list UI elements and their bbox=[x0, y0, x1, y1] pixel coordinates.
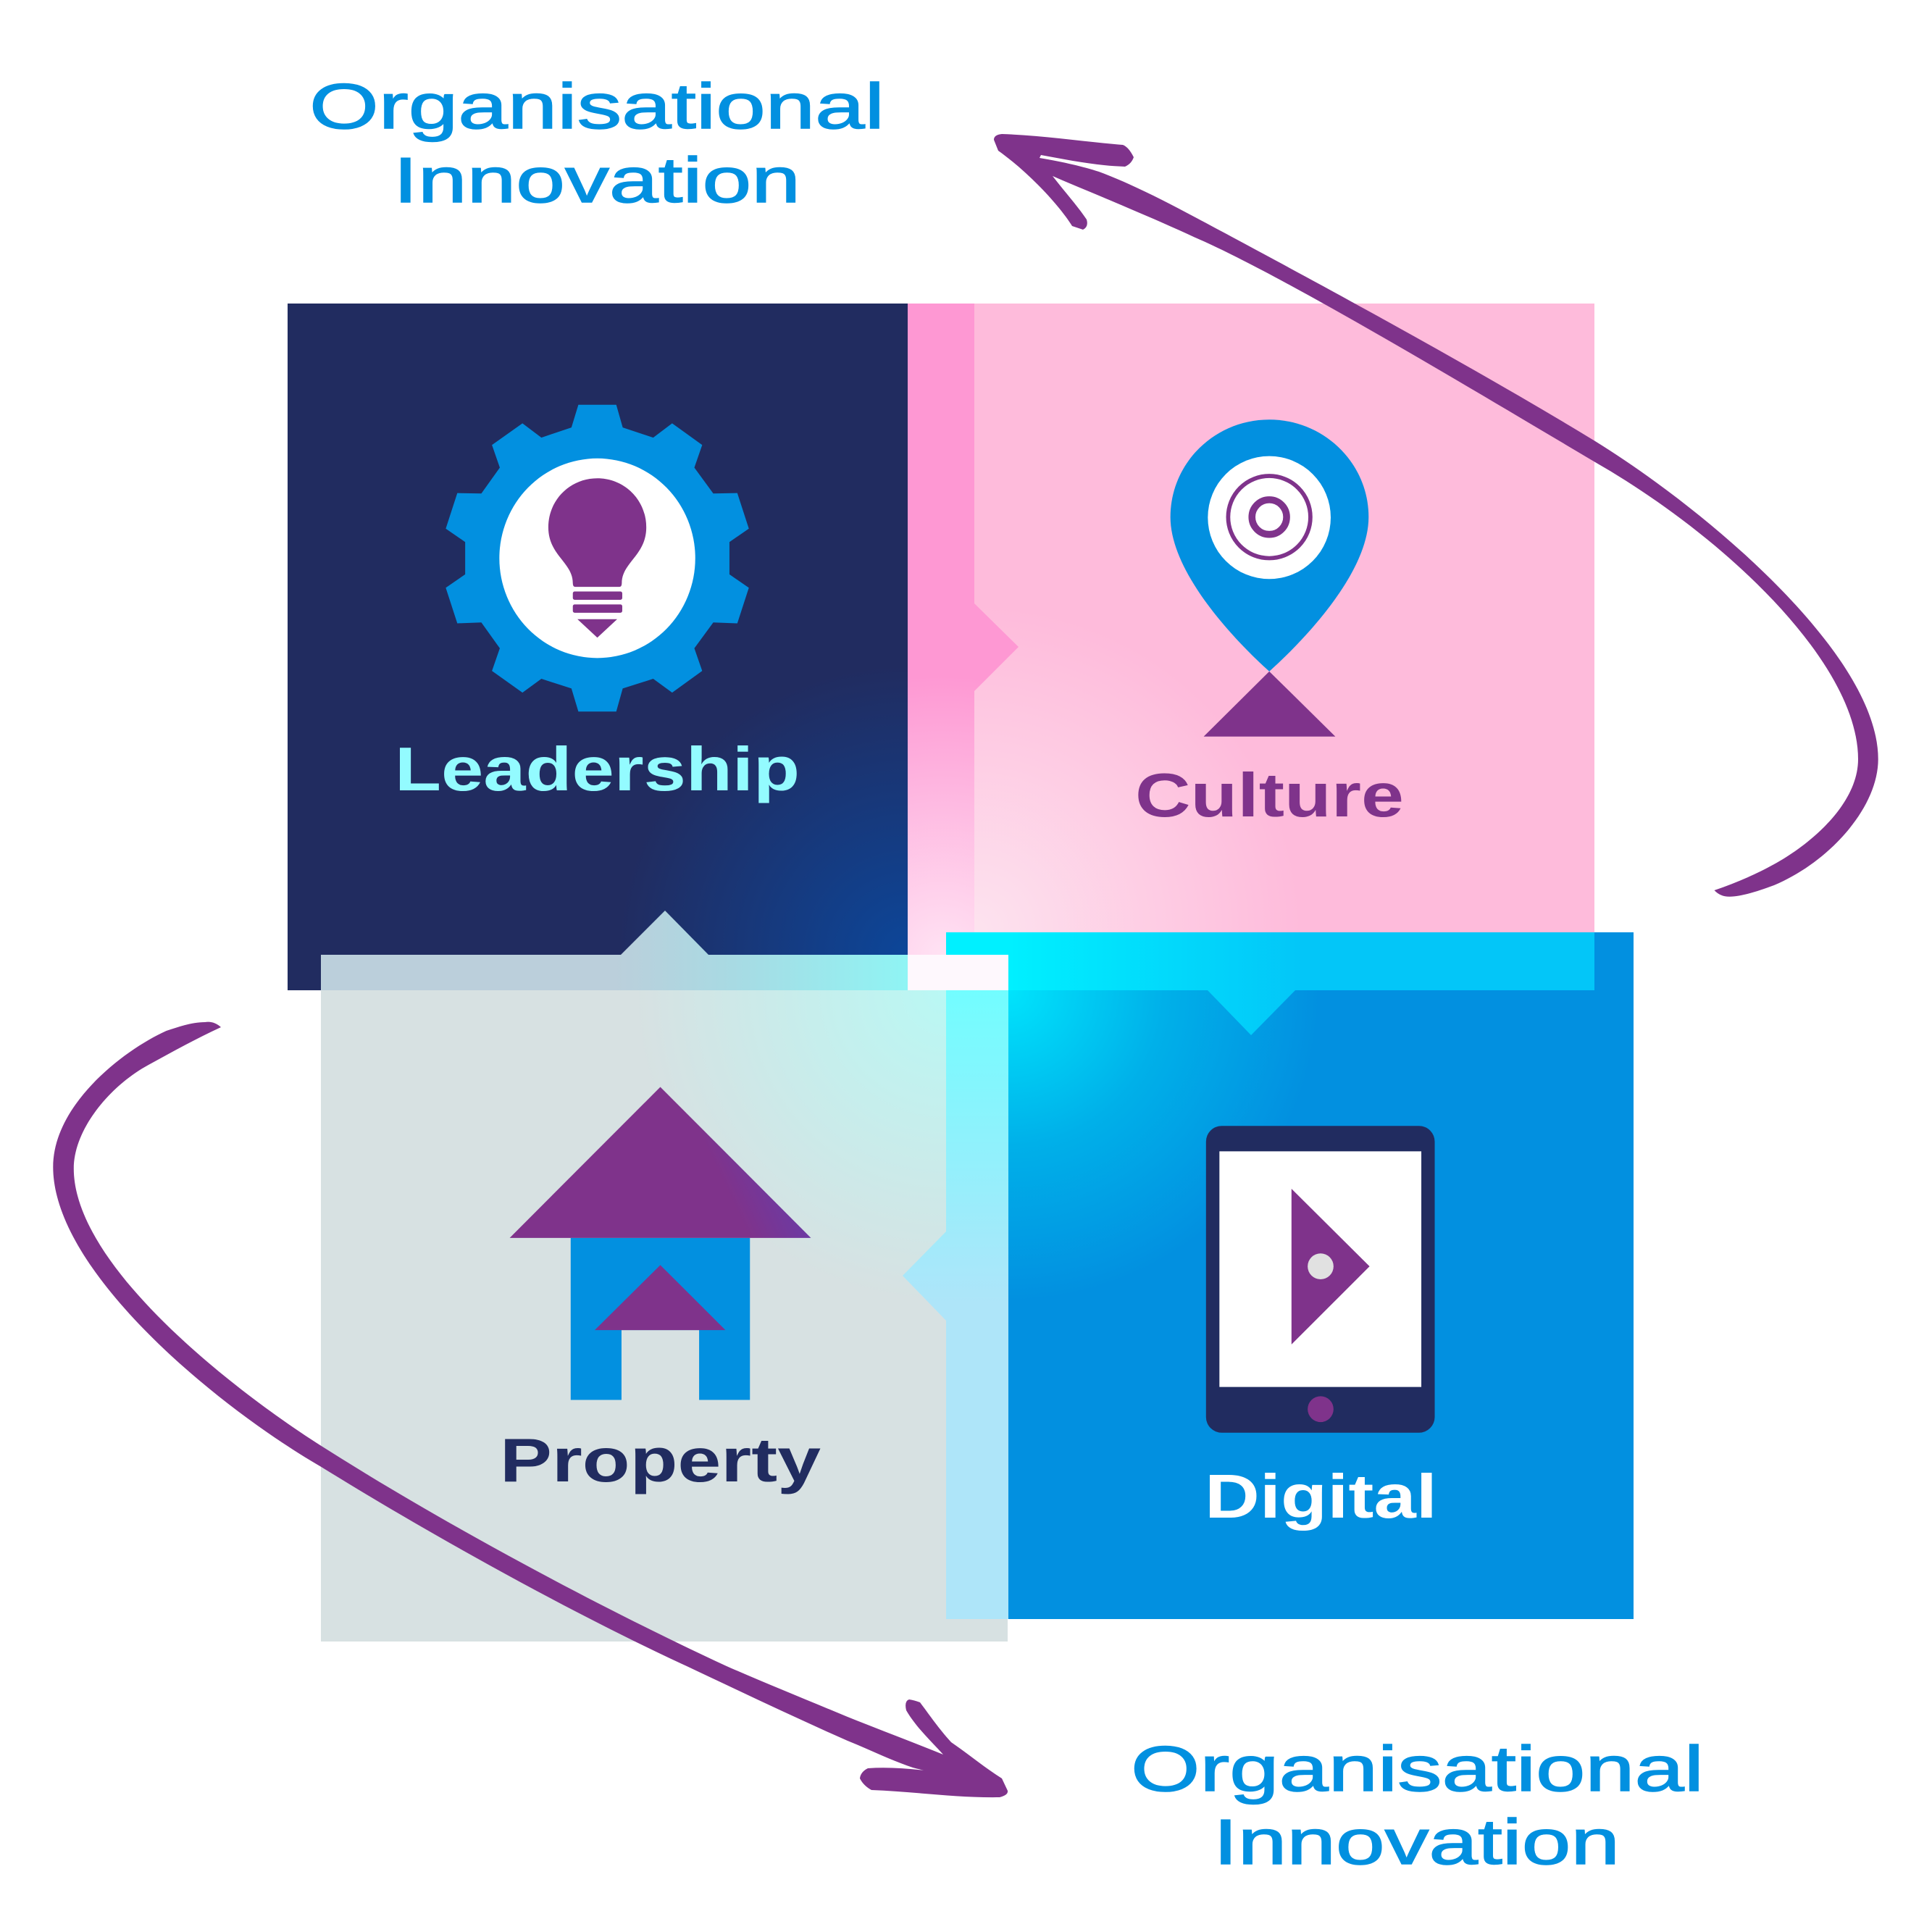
panel: leadership background bbox=[288, 304, 974, 990]
label: culture: Culture bbox=[1135, 761, 1404, 830]
overlap: property arrow tab over leadership bbox=[321, 911, 908, 990]
heading: organisational innovation top: Organisational bbox=[309, 70, 885, 142]
heading: organisational innovation bottom: Innovation bbox=[1213, 1806, 1620, 1878]
heading: organisational innovation top: Innovation bbox=[393, 144, 800, 216]
heading: organisational innovation bottom: Organisational bbox=[1131, 1733, 1704, 1805]
heading: organisational innovation top bbox=[309, 70, 885, 216]
arrow: top right curved arrow bbox=[994, 134, 1878, 897]
heading: organisational innovation bottom bbox=[1131, 1733, 1704, 1878]
icon: house bbox=[510, 1087, 811, 1400]
overlap: centre highlight bbox=[908, 955, 1008, 990]
overlap: culture arrow tab over digital bbox=[946, 932, 1594, 1035]
overlap: digital arrow tab over property bbox=[903, 990, 1008, 1619]
arrow: bottom left curved arrow bbox=[53, 1022, 1008, 1797]
icon: tablet with play button bbox=[1206, 1126, 1435, 1433]
label: leadership: Leadership bbox=[395, 735, 800, 804]
panel: property background bbox=[321, 955, 1008, 1642]
icon: location pin with target bbox=[1171, 419, 1368, 737]
label: property: Property bbox=[500, 1426, 821, 1495]
panel: culture background bbox=[908, 304, 1594, 990]
overlap: leadership arrow tab over culture bbox=[908, 304, 1019, 990]
label: digital: Digital bbox=[1205, 1463, 1437, 1531]
icon: gear with light bulb bbox=[446, 405, 749, 711]
panel: digital background bbox=[946, 932, 1634, 1619]
